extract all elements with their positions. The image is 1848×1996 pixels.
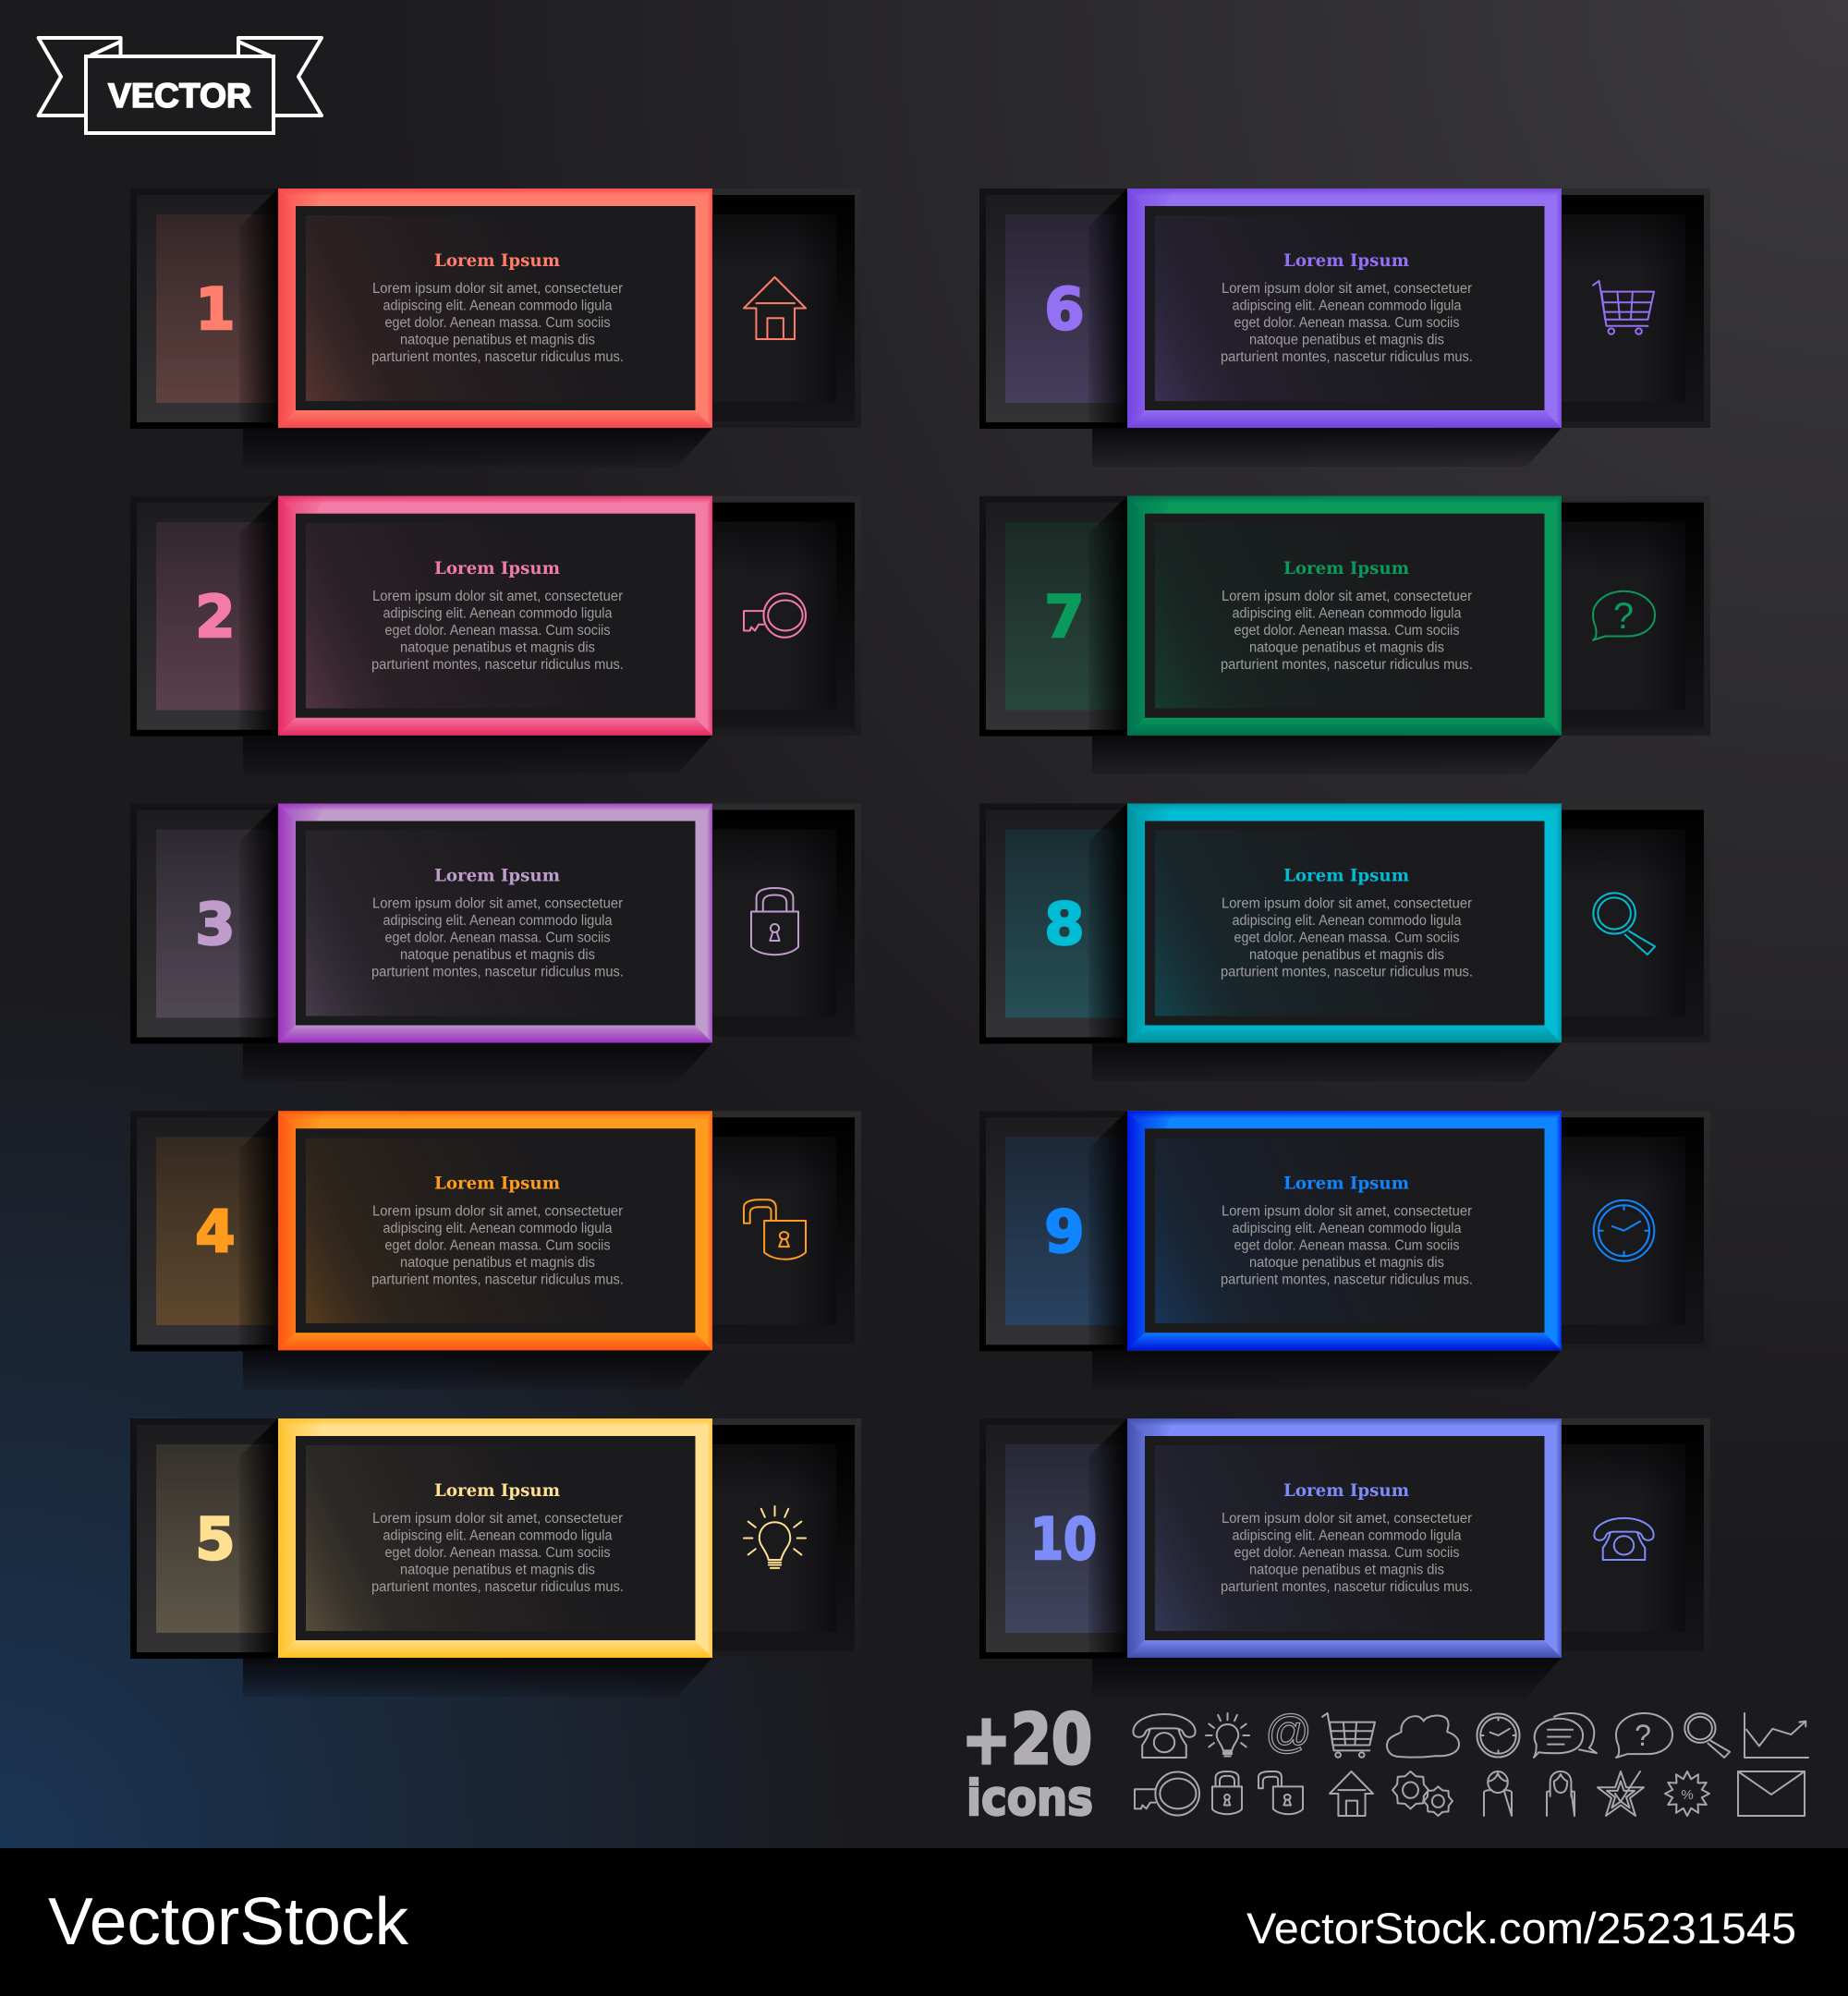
side frames	[130, 1418, 861, 1659]
footer url: VectorStock.com/25231545	[1246, 1904, 1796, 1953]
coloured frame	[278, 804, 712, 1042]
icon: shopping cart	[1593, 281, 1654, 335]
panel: item 7	[979, 496, 1710, 774]
number: 3	[195, 891, 236, 957]
icon: clock	[1594, 1200, 1654, 1261]
body text	[371, 1203, 624, 1287]
icon: question bubble: ?	[1613, 596, 1634, 637]
panel: item 10	[979, 1418, 1710, 1697]
icon: telephone	[1594, 1518, 1654, 1560]
body text: eget dolor. Aenean massa. Cum sociis	[1234, 623, 1460, 639]
body text: eget dolor. Aenean massa. Cum sociis	[384, 930, 611, 946]
icon: envelope	[1738, 1771, 1805, 1816]
body text: natoque penatibus et magnis dis	[1249, 947, 1444, 963]
panel: item 3	[130, 804, 861, 1081]
side frames	[130, 496, 861, 736]
body text: natoque penatibus et magnis dis	[400, 1255, 595, 1271]
body text: natoque penatibus et magnis dis	[1249, 1562, 1444, 1578]
number: 4	[195, 1198, 236, 1265]
shadows	[1088, 189, 1562, 467]
body text: parturient montes, nascetur ridiculus mus.	[371, 349, 624, 365]
number tile	[1005, 522, 1114, 710]
body text	[371, 281, 624, 365]
body text: adipiscing elit. Aenean commodo ligula	[383, 1528, 613, 1543]
heading: Lorem Ipsum	[1283, 1173, 1409, 1193]
shadows	[1088, 1418, 1562, 1697]
coloured frame	[1127, 1111, 1562, 1350]
heading: Lorem Ipsum	[434, 1480, 560, 1501]
icon: house	[1330, 1771, 1373, 1816]
icon: discount badge	[1665, 1771, 1709, 1816]
icon: gears	[1392, 1771, 1453, 1816]
side frames	[979, 804, 1710, 1044]
body text: eget dolor. Aenean massa. Cum sociis	[1234, 1545, 1460, 1561]
body text: Lorem ipsum dolor sit amet, consectetuer	[372, 281, 623, 297]
body text	[1221, 1511, 1473, 1595]
side frames	[130, 189, 861, 429]
icon: chat bubbles	[1534, 1713, 1597, 1758]
body text: natoque penatibus et magnis dis	[1249, 1255, 1444, 1271]
heading: +20 icons	[962, 1698, 1093, 1827]
number: 2	[195, 583, 236, 651]
icon: light bulb	[744, 1506, 806, 1568]
body text	[1221, 896, 1473, 980]
ribbon badge: VECTOR	[39, 38, 322, 133]
icon: cloud	[1387, 1716, 1459, 1758]
heading: Lorem Ipsum	[434, 250, 560, 271]
body text: adipiscing elit. Aenean commodo ligula	[383, 298, 613, 314]
number tile	[156, 1137, 278, 1325]
body text: natoque penatibus et magnis dis	[400, 639, 595, 655]
text panel	[296, 821, 695, 1026]
heading: +20 icons: +20	[962, 1698, 1092, 1780]
body text	[371, 1511, 624, 1595]
panel: item 4	[130, 1111, 861, 1389]
coloured frame	[278, 1418, 712, 1658]
body text: natoque penatibus et magnis dis	[400, 1562, 595, 1578]
body text: Lorem ipsum dolor sit amet, consectetuer	[1222, 281, 1472, 297]
number: 7	[1044, 583, 1085, 651]
coloured frame	[1127, 189, 1562, 428]
body text: adipiscing elit. Aenean commodo ligula	[1233, 605, 1462, 621]
text panel	[1145, 514, 1545, 718]
text panel	[1145, 1436, 1545, 1640]
panel: item 6	[979, 189, 1710, 467]
body text: natoque penatibus et magnis dis	[400, 947, 595, 963]
heading: Lorem Ipsum	[434, 558, 560, 578]
number: 5	[195, 1505, 236, 1573]
body text: eget dolor. Aenean massa. Cum sociis	[1234, 930, 1460, 946]
number tile	[156, 522, 278, 711]
icon: closed lock	[1212, 1771, 1242, 1814]
body text: parturient montes, nascetur ridiculus mus.	[1221, 1272, 1473, 1287]
body text: adipiscing elit. Aenean commodo ligula	[383, 605, 613, 621]
body text: parturient montes, nascetur ridiculus mus.	[371, 1579, 624, 1595]
text panel	[296, 514, 695, 718]
footer bar	[0, 1848, 1848, 1996]
text panel	[296, 206, 695, 410]
heading: Lorem Ipsum	[434, 865, 560, 885]
body text: Lorem ipsum dolor sit amet, consectetuer	[372, 589, 623, 604]
text panel	[1145, 1128, 1545, 1333]
body text: parturient montes, nascetur ridiculus mus.	[1221, 1579, 1473, 1595]
side frames	[979, 189, 1710, 429]
panel: item 9	[979, 1111, 1710, 1389]
panel: item 5	[130, 1418, 861, 1697]
number: 9	[1044, 1198, 1085, 1265]
shadows	[1088, 496, 1562, 774]
number tile	[156, 830, 278, 1018]
icon: magnifier	[1684, 1713, 1730, 1758]
body text: Lorem ipsum dolor sit amet, consectetuer	[1222, 896, 1472, 911]
icon: closed lock	[751, 888, 798, 955]
body text: parturient montes, nascetur ridiculus mus.	[371, 1272, 624, 1287]
icon: line chart	[1745, 1713, 1808, 1758]
coloured frame	[1127, 1418, 1562, 1658]
icon: open lock	[1258, 1771, 1303, 1814]
number tile	[1005, 830, 1127, 1018]
icon set: twenty outline icons	[1133, 1706, 1808, 1816]
body text: Lorem ipsum dolor sit amet, consectetuer	[1222, 1511, 1472, 1527]
body text	[371, 589, 624, 673]
coloured frame	[1127, 804, 1562, 1042]
heading: Lorem Ipsum	[1283, 1480, 1409, 1501]
side frames	[979, 496, 1710, 736]
coloured frame	[1127, 496, 1562, 736]
shadows	[239, 189, 712, 467]
body text	[371, 896, 624, 980]
text panel	[1145, 206, 1545, 410]
body text: natoque penatibus et magnis dis	[400, 333, 595, 347]
body text: parturient montes, nascetur ridiculus mus.	[371, 657, 624, 673]
ribbon badge: VECTOR: VECTOR	[108, 77, 251, 115]
body text: adipiscing elit. Aenean commodo ligula	[1233, 298, 1462, 314]
body text: eget dolor. Aenean massa. Cum sociis	[1234, 1237, 1460, 1253]
body text	[1221, 589, 1473, 673]
icon: at sign: @	[1265, 1706, 1312, 1758]
body text: eget dolor. Aenean massa. Cum sociis	[384, 623, 611, 639]
body text: Lorem ipsum dolor sit amet, consectetuer	[1222, 1203, 1472, 1219]
body text: adipiscing elit. Aenean commodo ligula	[1233, 1221, 1462, 1236]
number: 6	[1044, 275, 1085, 343]
coloured frame	[278, 496, 712, 736]
icon: house	[744, 277, 806, 339]
icon: question bubble	[1593, 591, 1655, 640]
icon: key	[1135, 1771, 1199, 1816]
number: 10	[1030, 1505, 1097, 1573]
body text: parturient montes, nascetur ridiculus mus.	[371, 965, 624, 980]
icon: clock	[1477, 1713, 1520, 1758]
body text: eget dolor. Aenean massa. Cum sociis	[1234, 315, 1460, 331]
icon: magnifier	[1593, 893, 1655, 955]
icon: man	[1484, 1771, 1512, 1816]
number tile	[156, 214, 278, 403]
panel: item 1	[130, 189, 861, 467]
body text: adipiscing elit. Aenean commodo ligula	[1233, 913, 1462, 929]
icon: question bubble: ?	[1635, 1719, 1651, 1752]
heading: +20 icons: icons	[967, 1771, 1093, 1827]
shadows	[239, 1111, 712, 1389]
number tile	[1005, 1444, 1127, 1633]
heading: Lorem Ipsum	[1283, 865, 1409, 885]
text panel	[296, 1436, 695, 1640]
text panel	[296, 1128, 695, 1333]
heading: Lorem Ipsum	[1283, 558, 1409, 578]
body text: Lorem ipsum dolor sit amet, consectetuer	[372, 896, 623, 911]
body text: eget dolor. Aenean massa. Cum sociis	[384, 315, 611, 331]
shadows	[239, 496, 712, 774]
body text: natoque penatibus et magnis dis	[1249, 333, 1444, 347]
side frames	[979, 1111, 1710, 1351]
icon: shopping cart	[1322, 1713, 1375, 1758]
body text: adipiscing elit. Aenean commodo ligula	[1233, 1528, 1462, 1543]
icon: discount badge: %	[1681, 1787, 1694, 1803]
body text: eget dolor. Aenean massa. Cum sociis	[384, 1545, 611, 1561]
heading: Lorem Ipsum	[434, 1173, 560, 1193]
shadows	[239, 804, 712, 1081]
body text: parturient montes, nascetur ridiculus mus.	[1221, 657, 1473, 673]
icon: light bulb	[1206, 1713, 1249, 1757]
panel: item 8	[979, 804, 1710, 1081]
text panel	[1145, 821, 1545, 1026]
shadows	[1088, 804, 1562, 1081]
shadows	[239, 1418, 712, 1697]
body text: adipiscing elit. Aenean commodo ligula	[383, 1221, 613, 1236]
side frames	[130, 804, 861, 1044]
body text: parturient montes, nascetur ridiculus mus.	[1221, 349, 1473, 365]
number: 1	[195, 275, 236, 343]
body text: Lorem ipsum dolor sit amet, consectetuer	[1222, 589, 1472, 604]
body text: eget dolor. Aenean massa. Cum sociis	[384, 1237, 611, 1253]
coloured frame	[278, 189, 712, 428]
shadows	[1088, 1111, 1562, 1389]
side frames	[979, 1418, 1710, 1659]
body text	[1221, 281, 1473, 365]
number tile	[156, 1444, 278, 1633]
footer brand: VectorStock	[48, 1885, 409, 1959]
icon: woman	[1547, 1771, 1574, 1816]
side frames	[130, 1111, 861, 1351]
body text: Lorem ipsum dolor sit amet, consectetuer	[372, 1511, 623, 1527]
body text: adipiscing elit. Aenean commodo ligula	[383, 913, 613, 929]
icon: question bubble	[1616, 1713, 1672, 1758]
icon: key	[744, 593, 806, 638]
heading: Lorem Ipsum	[1283, 250, 1409, 271]
body text: parturient montes, nascetur ridiculus mus.	[1221, 965, 1473, 980]
number: 8	[1044, 891, 1085, 957]
icon: telephone	[1133, 1714, 1196, 1758]
number tile	[1005, 214, 1127, 403]
coloured frame	[278, 1111, 712, 1350]
panel: item 2	[130, 496, 861, 774]
body text	[1221, 1203, 1473, 1287]
icon: star with check	[1598, 1771, 1644, 1816]
number tile	[1005, 1137, 1127, 1325]
body text: Lorem ipsum dolor sit amet, consectetuer	[372, 1203, 623, 1219]
body text: natoque penatibus et magnis dis	[1249, 639, 1444, 655]
icon: open lock	[744, 1199, 806, 1260]
